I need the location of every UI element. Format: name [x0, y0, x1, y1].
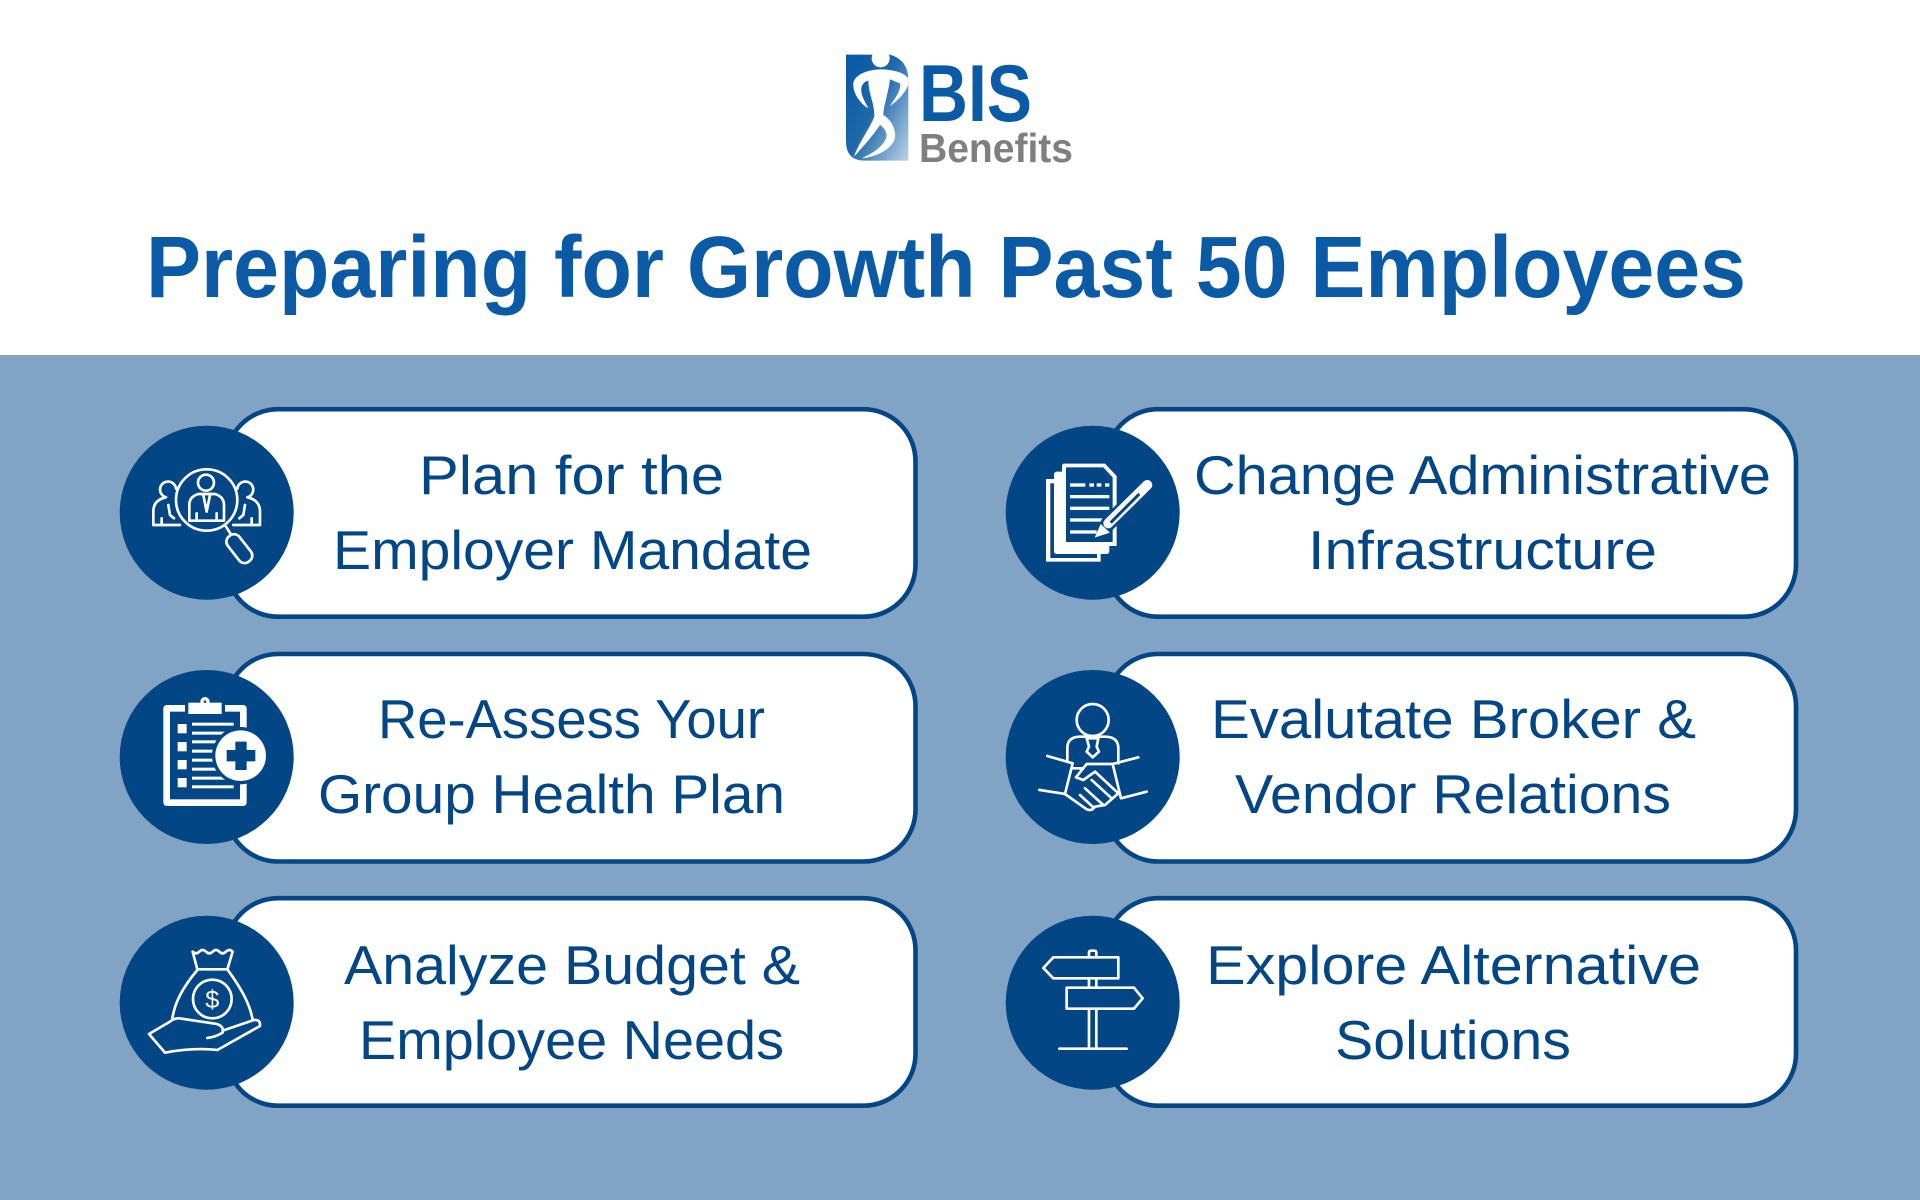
label: Vendor Relations — [1235, 763, 1671, 825]
label — [333, 444, 812, 581]
label: Employer Mandate — [333, 519, 812, 581]
panel: Explore Alternative Solutions — [1006, 898, 1796, 1106]
logo wordmark Benefits: Benefits — [919, 125, 1073, 171]
icon: clipboard with medical cross — [163, 697, 269, 806]
panel: Evalutate Broker & Vendor Relations — [1006, 654, 1796, 862]
label — [1194, 444, 1771, 581]
panel: Analyze Budget & Employee Needs — [120, 898, 915, 1106]
label — [344, 934, 800, 1071]
label: Infrastructure — [1308, 519, 1657, 581]
label: Analyze Budget & — [344, 934, 800, 996]
label: Re-Assess Your — [378, 688, 765, 750]
label: Employee Needs — [359, 1009, 784, 1071]
blue background panel — [0, 355, 1920, 1200]
icon: money bag in hand: $ — [205, 986, 219, 1014]
icon: people search magnifier — [153, 469, 260, 566]
logo mark: runner shield — [846, 49, 908, 161]
label: Change Administrative — [1194, 444, 1771, 506]
label: Group Health Plan — [318, 763, 785, 825]
label: Solutions — [1335, 1009, 1571, 1071]
logo: BIS Benefits — [846, 49, 1073, 171]
label: Explore Alternative — [1206, 934, 1701, 996]
logo wordmark BIS: BIS — [919, 49, 1032, 139]
icon: direction signpost — [1043, 951, 1143, 1049]
label: Plan for the — [419, 444, 724, 506]
panel: Re-Assess Your Group Health Plan — [120, 654, 915, 862]
panel: Change Administrative Infrastructure — [1006, 409, 1796, 617]
icon: person with handshake — [1039, 704, 1147, 810]
panel: Plan for the Employer Mandate — [120, 409, 915, 617]
icon: documents and pen — [1046, 464, 1147, 562]
title: Preparing for Growth Past 50 Employees — [146, 219, 1746, 316]
label: Evalutate Broker & — [1211, 688, 1696, 750]
label — [318, 688, 785, 825]
icon: money bag in hand — [149, 950, 260, 1053]
label — [1206, 934, 1701, 1071]
label — [1211, 688, 1696, 825]
